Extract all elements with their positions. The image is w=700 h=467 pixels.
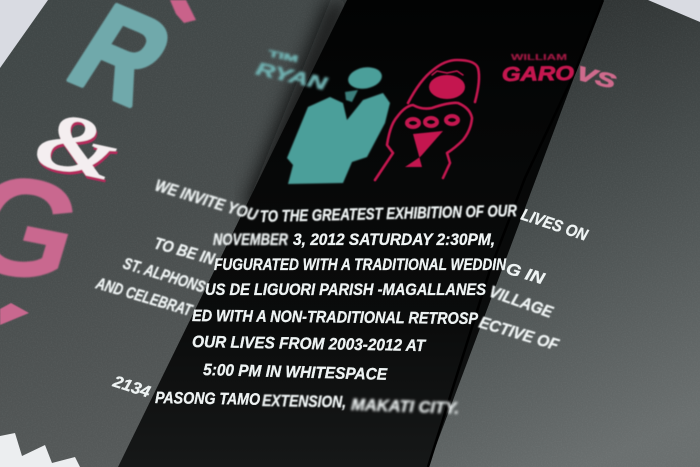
line 1	[153, 177, 591, 245]
invitation text	[93, 177, 591, 418]
bride surname	[502, 63, 619, 94]
line 1: WE INVITE YOU	[153, 177, 260, 225]
line 5: ED WITH A NON-TRADITIONAL RETROSP	[192, 307, 479, 328]
line 8	[110, 372, 459, 418]
line 4	[121, 255, 556, 322]
line 4: ST. ALPHONS	[121, 255, 207, 297]
line 2	[213, 231, 495, 249]
panel: black center band	[118, 0, 603, 467]
paper grain texture	[564, 17, 664, 196]
ampersand: &	[29, 96, 128, 202]
line 3: TO BE IN	[152, 235, 217, 269]
line 5	[93, 274, 561, 355]
line 8: EXTENSION,	[262, 392, 346, 411]
bride small name: WILLIAM	[511, 53, 568, 62]
white zigzag	[0, 433, 80, 467]
line 8: 2134	[110, 372, 152, 402]
line 8: MAKATI CITY.	[351, 396, 459, 418]
line 5: AND CELEBRAT	[93, 274, 195, 320]
line 5: ECTIVE OF	[477, 314, 561, 355]
surname end on grey card: VS	[574, 63, 619, 94]
line 3	[152, 235, 548, 289]
line 2: NOVEMBER	[213, 231, 288, 249]
line 4: VILLAGE	[487, 283, 556, 322]
line 3: G IN	[504, 260, 548, 289]
line 6: OUR LIVES FROM 2003-2012 AT	[192, 333, 427, 355]
pink fragment top	[170, 0, 196, 23]
ampersand: &	[28, 93, 127, 199]
groom small name	[254, 48, 330, 94]
bride surname: GARO	[502, 63, 575, 86]
line 1: LIVES ON	[519, 206, 591, 245]
band right edge	[428, 0, 603, 467]
line 8: PASONG TAMO	[155, 389, 260, 409]
panel: left card	[0, 0, 360, 467]
band shadow	[245, 0, 350, 210]
groom surname: RYAN	[254, 58, 330, 94]
line 1: TO THE GREATEST EXHIBITION OF OUR	[260, 202, 517, 226]
icon: bride figure	[375, 60, 479, 180]
line 2: 3, 2012 SATURDAY 2:30PM,	[293, 231, 495, 249]
line 7: 5:00 PM IN WHITESPACE	[203, 361, 388, 384]
icon: groom figure	[287, 65, 390, 184]
pink fragment left	[0, 303, 29, 325]
line 4: US DE LIGUORI PARISH -MAGALLANES	[205, 281, 486, 299]
panel: right card	[420, 0, 700, 467]
groom small name: TIM	[268, 48, 299, 64]
line 3: FUGURATED WITH A TRADITIONAL WEDDIN	[214, 256, 507, 274]
